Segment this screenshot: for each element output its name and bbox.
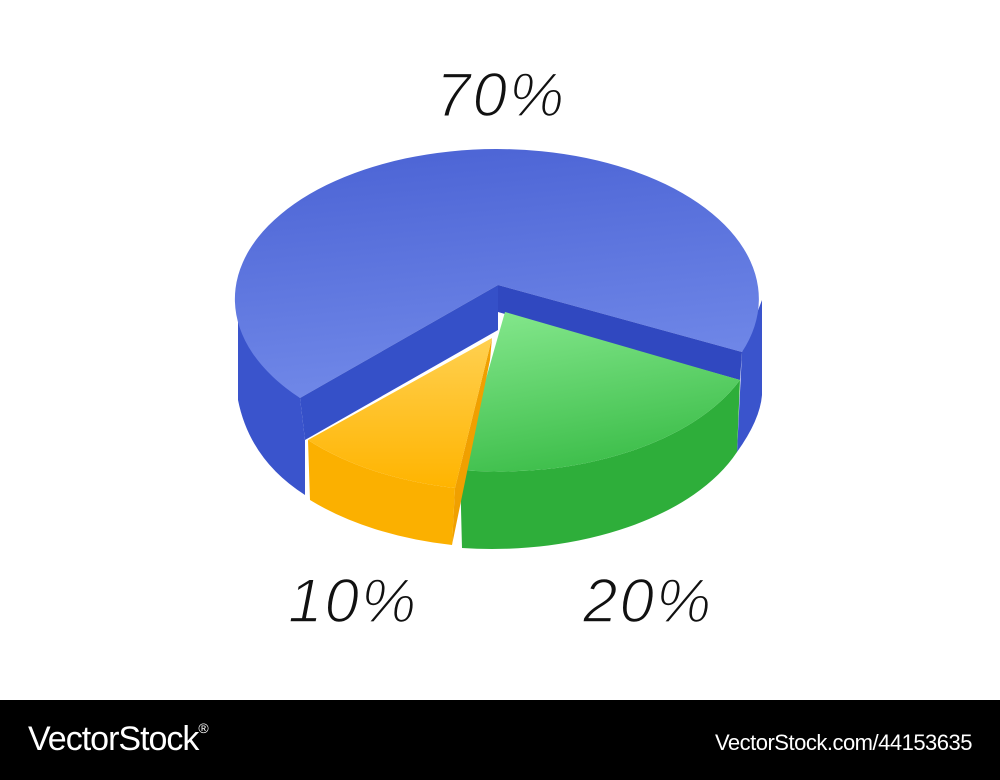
label: 70%: 70%: [436, 61, 566, 130]
slice: blue 70%: [235, 149, 762, 495]
footer logo: VectorStock®: [28, 720, 208, 758]
footer bar: [0, 700, 1000, 780]
label: 20%: 20%: [583, 567, 713, 636]
footer url: VectorStock.com/44153635: [715, 730, 972, 755]
slice: green 20%: [460, 312, 740, 549]
slice: yellow 10%: [308, 338, 492, 545]
label: 10%: 10%: [288, 567, 418, 636]
